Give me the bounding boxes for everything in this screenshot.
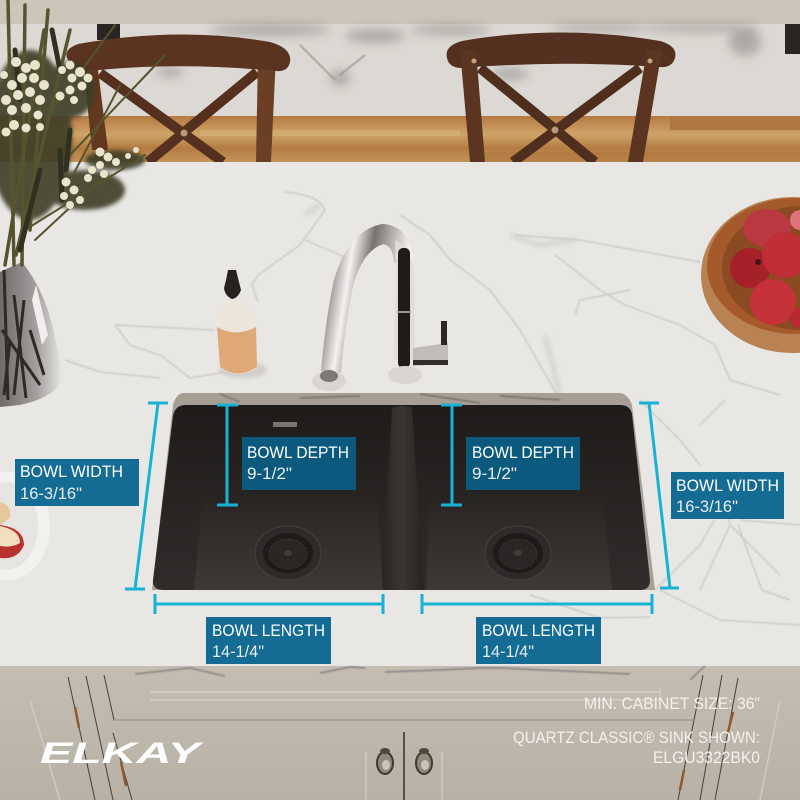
plant with white flowers — [0, 0, 165, 265]
countertop edge veining — [135, 666, 705, 680]
text: minimum cabinet size: MIN. CABINET SIZE: 36" — [584, 694, 760, 713]
marble countertop — [0, 162, 800, 666]
arrow: right bowl length line — [422, 594, 652, 614]
label: left bowl depth — [242, 437, 356, 490]
label: left bowl width — [15, 459, 139, 506]
sink rim — [152, 393, 655, 590]
faucet — [312, 234, 448, 391]
left chair — [66, 34, 290, 162]
marble veining — [65, 192, 800, 625]
label: left bowl width: 16-3/16" — [20, 484, 82, 503]
dimension: left bowl width — [15, 403, 168, 589]
label: left bowl length — [206, 617, 331, 664]
overflow slot — [273, 422, 297, 427]
dimension: right bowl depth — [441, 405, 580, 505]
dimension: right bowl length — [422, 594, 652, 664]
label: left bowl length: 14-1/4" — [212, 642, 264, 661]
logo: Elkay: ELKAY — [40, 737, 205, 770]
label: left bowl width: BOWL WIDTH — [20, 462, 123, 481]
arrow: right bowl depth line — [441, 405, 462, 505]
left basin floor — [194, 503, 383, 590]
text: sink model shown: ELGU3322BK0 — [653, 748, 760, 767]
right drain — [485, 526, 551, 580]
label: right bowl width: BOWL WIDTH — [676, 476, 779, 495]
right chair — [447, 32, 675, 162]
text: sink model shown — [513, 728, 760, 767]
text: sink model shown: QUARTZ CLASSIC® SINK SHOWN: — [513, 728, 760, 747]
label: left bowl length: BOWL LENGTH — [212, 621, 325, 640]
center divider — [381, 406, 424, 590]
arrow: left bowl width line — [125, 403, 168, 589]
bench leg and dark corner — [97, 24, 800, 54]
plate with apple slice — [0, 472, 50, 580]
cabinet knob left — [377, 748, 393, 774]
arrow: left bowl length line — [155, 594, 383, 614]
label: right bowl depth — [466, 437, 580, 490]
sink basin — [153, 405, 650, 590]
label: right bowl depth: 9-1/2" — [472, 464, 517, 483]
arrow: right bowl width line — [639, 403, 679, 588]
label: right bowl depth: BOWL DEPTH — [472, 443, 574, 462]
rim veins — [220, 394, 560, 403]
background: upholstered bench — [0, 0, 800, 24]
cabinet door details — [30, 675, 780, 800]
right basin floor — [426, 503, 612, 590]
apples — [730, 209, 800, 328]
label: right bowl length — [476, 617, 601, 664]
background: wood floor — [0, 116, 800, 162]
label: left bowl depth: BOWL DEPTH — [247, 443, 349, 462]
left drain — [255, 526, 321, 580]
dimension: left bowl length — [155, 594, 383, 664]
arrow: left bowl depth line — [217, 405, 238, 505]
background: patterned rug — [0, 24, 800, 117]
label: right bowl width: 16-3/16" — [676, 497, 738, 516]
label: left bowl depth: 9-1/2" — [247, 464, 292, 483]
vase with plant stems — [0, 262, 61, 407]
cabinet knob right — [416, 748, 432, 774]
dimension: right bowl width — [639, 403, 784, 588]
label: right bowl length: 14-1/4" — [482, 642, 534, 661]
dimension: left bowl depth — [217, 405, 356, 505]
soap bottle — [217, 270, 267, 378]
cabinet base — [0, 666, 800, 800]
label: right bowl width — [671, 472, 784, 519]
bowl of apples — [701, 197, 800, 353]
label: right bowl length: BOWL LENGTH — [482, 621, 595, 640]
